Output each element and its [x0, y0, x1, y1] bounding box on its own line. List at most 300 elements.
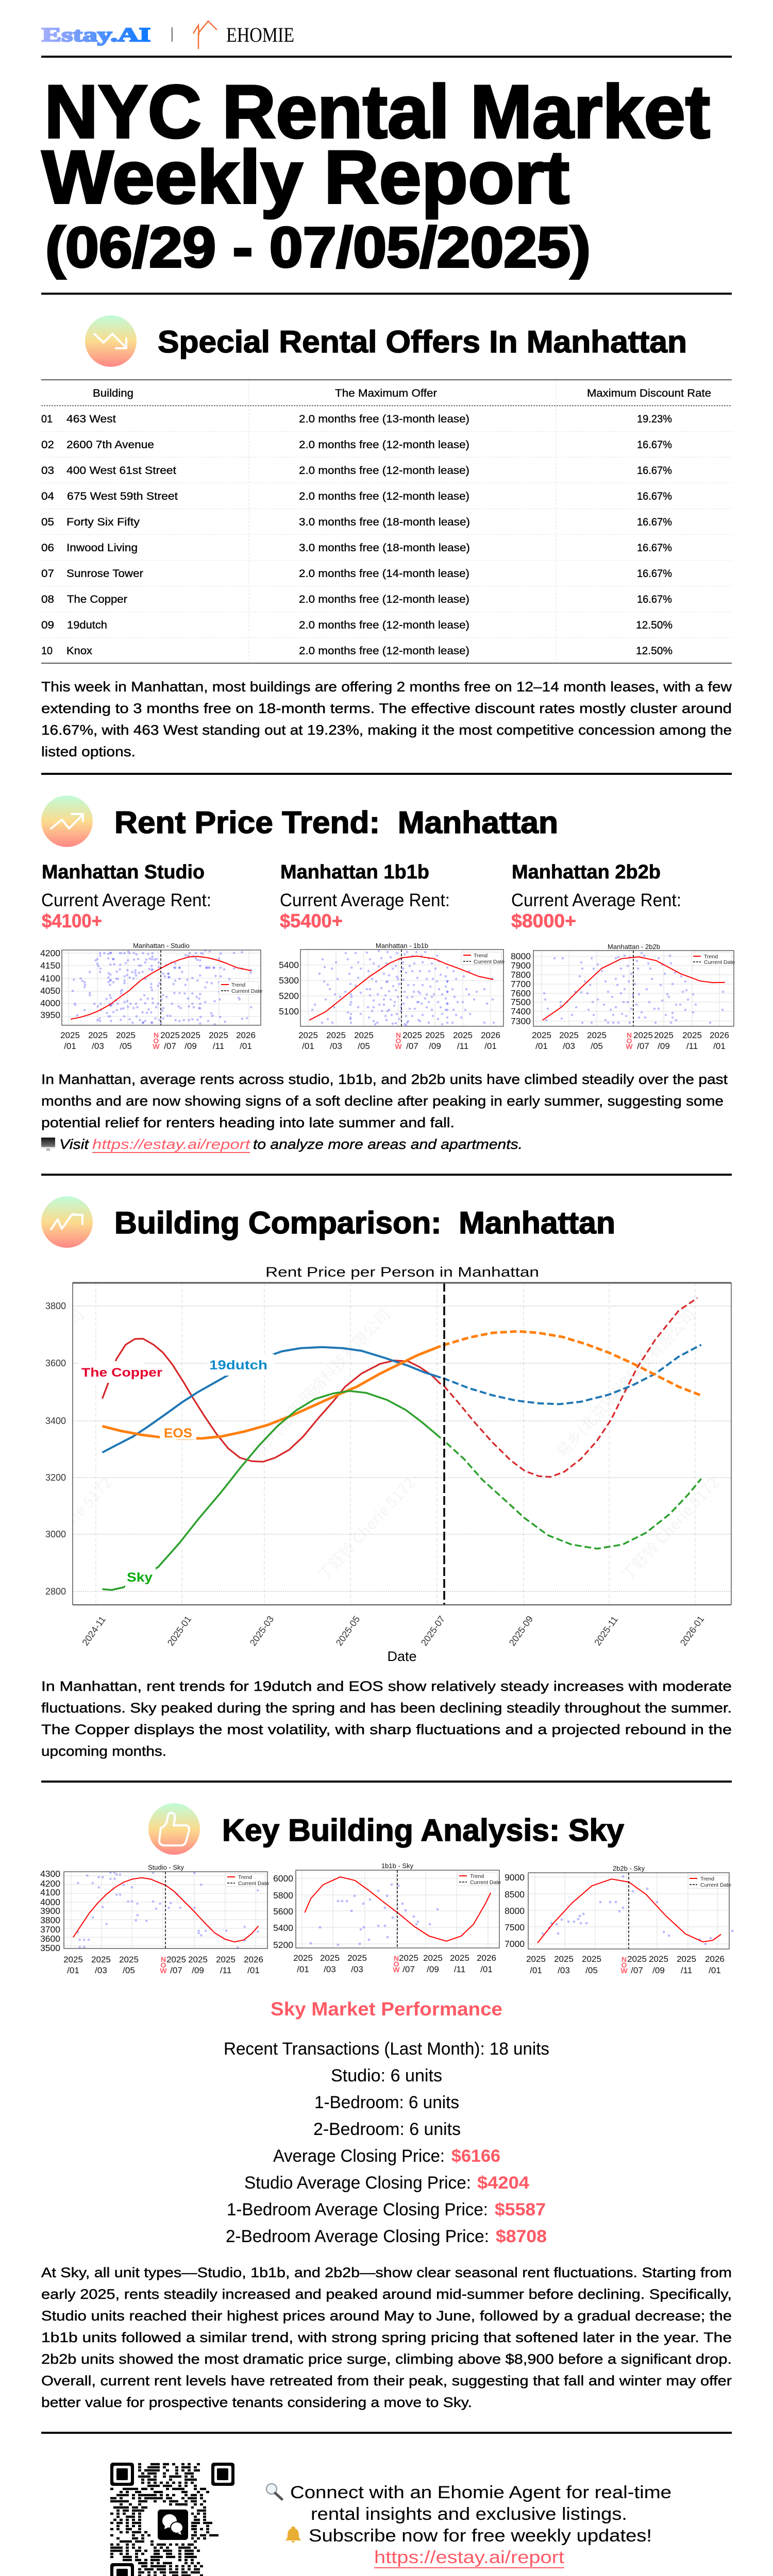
chart: Studio Sky: 2025	[119, 1955, 139, 1964]
chart: Manhattan Studio: /01	[240, 1041, 252, 1051]
chart: Manhattan Studio: 3950	[40, 1010, 60, 1020]
table: offers: 2.0 months free (12-month lease)	[299, 465, 469, 477]
icon: upward trend	[41, 795, 93, 847]
chart: 1b1b Sky: 2025	[293, 1953, 313, 1963]
stat: 1b1b: Manhattan 1b1b	[280, 861, 429, 883]
chart: rent price per person: 2800	[45, 1586, 66, 1597]
panel: key building analysis	[40, 1803, 732, 2410]
current date marker	[443, 1283, 445, 1605]
chart: Studio Sky: 2025	[188, 1955, 208, 1964]
chart: Manhattan Studio: /03	[92, 1041, 104, 1051]
table: offers: 675 West 59th Street	[67, 490, 178, 502]
chart: 1b1b Sky: 5400	[273, 1923, 293, 1933]
chart: Manhattan 1b1b: /11	[457, 1041, 468, 1051]
text: Sky analysis: better value for prospective tenants considering a move to Sky.	[41, 2395, 472, 2410]
chart: Manhattan Studio: 2025	[60, 1030, 80, 1040]
chart: 2b2b Sky: /01	[709, 1965, 721, 1975]
link: estay report: https://estay.ai/report	[374, 2548, 565, 2567]
text: building comparison summary: fluctuations. Sky peaked during the spring and has been declining steadily throughout the summer.	[41, 1700, 732, 1716]
chart: 1b1b Sky: N	[394, 1954, 399, 1962]
table: offers: 08	[41, 594, 54, 605]
chart: Manhattan Studio: /05	[120, 1041, 132, 1051]
chart: rent price per person: 2024-11	[80, 1614, 108, 1648]
stat: 2b2b	[511, 861, 681, 931]
chart: rent price per person: 易乡(北京)网络科技有限公司	[550, 1303, 700, 1462]
table: offers: 19dutch	[67, 619, 107, 631]
header logos	[42, 21, 294, 49]
chart: 1b1b Sky: Current Date	[470, 1879, 501, 1886]
table: offers: 16.67%	[637, 568, 672, 580]
icon: computer	[41, 1138, 55, 1151]
chart: Manhattan Studio: Current Date	[231, 988, 262, 994]
chart: Studio Sky: W	[160, 1967, 167, 1975]
chart: Manhattan 1b1b: /07	[406, 1041, 418, 1051]
chart: 2b2b Sky: 2025	[649, 1954, 668, 1964]
chart: Manhattan 2b2b: 7400	[511, 1006, 531, 1016]
stats: Sky market figures: Studio: 6 units	[331, 2066, 442, 2086]
stats: Sky market figures: $4204	[477, 2173, 529, 2193]
stats: Sky market figures: $6166	[451, 2146, 500, 2166]
chart: Manhattan 1b1b: W	[395, 1042, 402, 1050]
chart: Studio Sky: /11	[220, 1965, 231, 1975]
series: The Copper	[103, 1298, 697, 1477]
chart: Manhattan 1b1b: 5300	[279, 975, 299, 986]
text: rent trend summary: https://estay.ai/report	[92, 1137, 251, 1152]
table: offers: 16.67%	[637, 542, 672, 554]
text: Sky analysis: 1b1b units followed a similar trend, with strong spring pricing that softened later in the year. The	[41, 2330, 732, 2345]
text: building comparison summary	[41, 1679, 732, 1759]
table: offers: Sunrose Tower	[66, 568, 143, 580]
label: EOS: EOS	[164, 1426, 192, 1440]
chart: 1b1b Sky	[273, 1862, 501, 1974]
chart: 1b1b Sky: /09	[427, 1964, 439, 1974]
chart: Manhattan 1b1b: Manhattan - 1b1b	[376, 942, 428, 950]
table: offers: 3.0 months free (18-month lease)	[299, 516, 470, 528]
chart: 2b2b Sky: W	[620, 1967, 628, 1975]
chart: Manhattan Studio: /01	[64, 1041, 76, 1051]
table: offers: 12.50%	[636, 645, 673, 657]
chart: 2b2b Sky: 8500	[505, 1889, 525, 1900]
chart: Manhattan 1b1b: /03	[330, 1041, 342, 1051]
chart: 1b1b Sky: 2025	[423, 1953, 443, 1963]
chart: 2b2b Sky: 2b2b - Sky	[613, 1865, 645, 1872]
text: building comparison summary: In Manhattan, rent trends for 19dutch and EOS show relatively steady increases with moderate	[41, 1679, 732, 1694]
chart: rent price per person: 丁鈺铃 Cherie 5172	[8, 1471, 116, 1585]
chart: Manhattan 1b1b: 2026	[481, 1030, 500, 1040]
chart: Manhattan 2b2b: 2025	[559, 1030, 579, 1040]
chart: Manhattan Studio: 4050	[40, 986, 60, 996]
chart: Manhattan 1b1b: Trend	[474, 953, 488, 959]
table: offers: 16.67%	[637, 516, 672, 528]
text: Sky analysis	[41, 2265, 732, 2410]
stat: 2b2b: $8000+	[511, 910, 576, 931]
table: offers: 2.0 months free (12-month lease)	[299, 619, 469, 631]
table: offers: Knox	[66, 645, 93, 657]
chart: 2b2b Sky: /09	[652, 1965, 665, 1975]
logo: EHOMIE	[193, 21, 294, 49]
chart: Studio Sky: /05	[123, 1965, 135, 1975]
table: offers: 2.0 months free (14-month lease)	[299, 568, 469, 580]
chart: 1b1b Sky: /03	[351, 1964, 363, 1974]
table: offers: 2.0 months free (12-month lease)	[299, 594, 469, 605]
chart: Manhattan Studio: Manhattan - Studio	[133, 942, 190, 950]
chart: Manhattan 2b2b: 2025	[532, 1030, 551, 1040]
chart: 1b1b Sky: /07	[402, 1964, 415, 1974]
panel: building comparison	[0, 1196, 732, 1759]
chart: Manhattan Studio: 4000	[40, 998, 60, 1008]
chart: rent price per person: 3200	[45, 1472, 66, 1483]
chart: 1b1b Sky: 2026	[477, 1953, 496, 1963]
chart: Studio Sky: Studio - Sky	[148, 1863, 184, 1871]
stats: Sky market figures: $8708	[496, 2227, 547, 2246]
text: rent trend summary	[41, 1072, 728, 1153]
text: building comparison summary: The Copper displays the most volatility, with sharp fluctuations and a projected rebound in the	[41, 1722, 732, 1737]
stat: studio	[41, 861, 211, 931]
chart: Manhattan 2b2b: N	[627, 1031, 632, 1039]
series: 19dutch	[103, 1345, 701, 1452]
title: Weekly Report	[42, 135, 569, 219]
chart: Manhattan 2b2b: /05	[591, 1041, 603, 1051]
text: subscribe line: Subscribe now for free weekly updates!	[309, 2526, 652, 2546]
chart: Manhattan 1b1b: 2025	[298, 1030, 318, 1040]
chart: Manhattan 2b2b: Current Date	[704, 959, 735, 965]
heading: key building analysis: Key Building Analysis: Sky	[222, 1813, 625, 1848]
chart: Manhattan Studio: 2025	[209, 1030, 228, 1040]
chart: rent price per person: 2025-03	[248, 1614, 276, 1648]
chart: Studio Sky: N	[161, 1955, 166, 1963]
stats: Sky market figures: Studio Average Closing Price:	[244, 2173, 471, 2193]
label: 19dutch: 19dutch	[209, 1358, 267, 1372]
table: offers: 07	[41, 568, 54, 580]
chart: 1b1b Sky: 2025	[320, 1953, 340, 1963]
chart: 2b2b Sky: O	[621, 1961, 627, 1969]
chart: 2b2b Sky: 2026	[705, 1954, 725, 1964]
table: offers: 02	[41, 439, 54, 451]
chart: Studio Sky: /03	[95, 1965, 107, 1975]
chart: Manhattan 2b2b: Trend	[704, 954, 718, 960]
text: rent trend summary: potential relief for renters heading into late summer and fall.	[41, 1115, 455, 1130]
chart: Manhattan 1b1b: /05	[358, 1041, 370, 1051]
table: offers: 03	[41, 465, 54, 477]
stat: studio: $4100+	[42, 910, 102, 931]
chart: Manhattan Studio: 4150	[40, 960, 60, 971]
text: Sky analysis: Studio units reached their highest prices around May to June, followed by a gradual decrease; the	[41, 2308, 732, 2324]
text: Sky analysis: early 2025, rents steadily increased and peaked around mid-summer before declining. Specifically,	[41, 2286, 732, 2302]
chart: rent price per person: 3800	[45, 1301, 66, 1311]
table: offers: 09	[41, 619, 54, 631]
text: Sky analysis: At Sky, all unit types—Studio, 1b1b, and 2b2b—show clear seasonal rent fluctuations. Starting from	[41, 2265, 732, 2280]
chart: Studio Sky: Trend	[238, 1874, 252, 1880]
table: offers: 12.50%	[636, 619, 673, 631]
table: offers: 01	[41, 413, 53, 425]
chart: Manhattan 2b2b: 7700	[511, 979, 531, 989]
chart: 2b2b Sky: 2025	[526, 1954, 546, 1964]
chart: Studio Sky: 4200	[40, 1878, 60, 1889]
chart: Manhattan Studio: 2026	[236, 1030, 256, 1040]
chart: 1b1b Sky: 5800	[273, 1890, 293, 1901]
chart: Manhattan 2b2b: 7600	[511, 988, 531, 998]
chart: Manhattan Studio: 4200	[40, 948, 60, 958]
QR centre logo	[158, 2510, 188, 2540]
icon: downward trend	[85, 315, 137, 367]
heading: Sky market performance: Sky Market Performance	[271, 1998, 502, 2020]
title: (06/29 - 07/05/2025)	[45, 216, 591, 279]
chart: 1b1b Sky: 1b1b - Sky	[381, 1862, 414, 1870]
stat: 1b1b: $5400+	[280, 910, 343, 931]
chart: Manhattan 1b1b: 2025	[425, 1030, 445, 1040]
chart: Manhattan 2b2b: /09	[658, 1041, 670, 1051]
text: insights line: rental insights and exclusive listings.	[311, 2504, 627, 2524]
chart: 1b1b Sky: 6000	[273, 1873, 293, 1884]
chart: Manhattan 2b2b: /07	[637, 1041, 649, 1051]
chart: rent price per person: 易乡(北京)网络科技有限公司	[244, 1303, 394, 1462]
text: rent trend summary: months and are now showing signs of a soft decline after peaking in early summer, suggesting some	[41, 1093, 724, 1109]
stats: Sky market figures	[224, 2039, 549, 2246]
QR finder patterns	[110, 2463, 234, 2576]
table: offers: 2.0 months free (12-month lease)	[299, 490, 469, 502]
chart: Manhattan Studio: /07	[164, 1041, 176, 1051]
chart: 1b1b Sky: /03	[324, 1964, 336, 1974]
stats: Sky market figures: Recent Transactions (Last Month): 18 units	[224, 2039, 549, 2059]
chart: 2b2b Sky: Current Date	[700, 1882, 731, 1888]
chart: Manhattan Studio: Trend	[231, 982, 245, 988]
chart: Manhattan 1b1b: Current Date	[474, 959, 505, 965]
chart: Manhattan 1b1b: 5100	[279, 1006, 299, 1016]
text: offers summary: extending to 3 months free on 18-month terms. The effective discount rates mostly cluster around	[41, 701, 732, 716]
chart: Manhattan 1b1b: 2025	[326, 1030, 346, 1040]
chart: Manhattan 1b1b: N	[396, 1031, 401, 1039]
text: offers summary: This week in Manhattan, most buildings are offering 2 months free on 12–14 month leases, with a few	[41, 679, 732, 694]
text: rent trend summary: Visit	[59, 1137, 90, 1152]
chart: Studio Sky: 3600	[40, 1934, 60, 1944]
table: offers: 06	[41, 542, 54, 554]
chart: Manhattan Studio: /09	[184, 1041, 197, 1051]
chart: 1b1b Sky: /01	[297, 1964, 309, 1974]
axis label: Date: Date	[387, 1649, 417, 1664]
chart: Manhattan Studio: W	[153, 1042, 160, 1050]
chart: Studio Sky: 3500	[40, 1943, 60, 1953]
chart: Manhattan Studio: 4100	[40, 973, 60, 984]
stats: Sky market figures: $5587	[495, 2200, 546, 2219]
chart: Manhattan Studio: N	[154, 1031, 159, 1039]
icon: bell	[285, 2527, 301, 2543]
chart: Manhattan 2b2b: 2026	[710, 1030, 729, 1040]
table: offers: The Copper	[67, 594, 127, 605]
chart: rent price per person	[0, 1264, 731, 1664]
chart: 2b2b Sky: /01	[530, 1965, 542, 1975]
heading: building comparison: Building Comparison: Manhattan	[114, 1206, 615, 1240]
chart: Studio Sky: 4300	[40, 1869, 60, 1879]
chart: Manhattan 1b1b: 2025	[402, 1030, 422, 1040]
chart: Studio Sky: Current Date	[238, 1880, 269, 1887]
chart: 2b2b Sky: 2025	[582, 1954, 601, 1964]
chart: Manhattan 2b2b: O	[627, 1037, 632, 1045]
chart: Manhattan 1b1b	[279, 942, 505, 1051]
chart: 1b1b Sky: 2025	[347, 1953, 367, 1963]
chart: 1b1b Sky: Trend	[470, 1873, 484, 1879]
stat: 1b1b	[280, 861, 450, 931]
heading: rent price trend: Rent Price Trend: Manhattan	[114, 805, 558, 840]
chart: 2b2b Sky: /03	[558, 1965, 570, 1975]
chart: 1b1b Sky: W	[393, 1965, 400, 1974]
table: offers: Maximum Discount Rate	[587, 387, 711, 399]
chart: 2b2b Sky: N	[621, 1955, 627, 1963]
stat: studio: Manhattan Studio	[42, 861, 205, 883]
label: 19dutch	[207, 1354, 274, 1376]
text: building comparison summary: upcoming months.	[41, 1743, 166, 1759]
chart: rent price per person: 2026-01	[678, 1614, 706, 1648]
chart: 1b1b Sky: 5200	[273, 1940, 293, 1950]
chart: 2b2b Sky: 7000	[505, 1939, 525, 1949]
table: offers: 16.67%	[637, 490, 672, 502]
table: offers: 463 West	[66, 413, 116, 425]
table: offers: 10	[41, 645, 53, 657]
chart: Manhattan 1b1b: 5400	[279, 960, 299, 970]
series: EOS	[103, 1331, 701, 1438]
stats: Sky market figures: Average Closing Price:	[273, 2146, 445, 2166]
chart: Studio Sky: O	[161, 1961, 166, 1969]
chart: Manhattan 2b2b: 2025	[633, 1030, 653, 1040]
chart: Studio Sky: 2026	[244, 1955, 263, 1964]
stat: 2b2b: Current Average Rent:	[511, 890, 681, 910]
chart: Studio Sky: /07	[170, 1965, 182, 1975]
chart: 2b2b Sky: 8000	[505, 1906, 525, 1916]
chart: rent price per person: 2025-01	[165, 1614, 193, 1648]
chart: Manhattan Studio: 2025	[181, 1030, 200, 1040]
chart: Manhattan 2b2b: W	[626, 1042, 633, 1050]
chart: Manhattan 2b2b: /01	[713, 1041, 726, 1051]
chart: Studio Sky: 2025	[91, 1955, 111, 1964]
panel: special rental offers	[41, 315, 732, 759]
chart: Manhattan 1b1b: /09	[429, 1041, 441, 1051]
chart: Studio Sky: 3800	[40, 1915, 60, 1925]
chart: Manhattan 1b1b: /01	[302, 1041, 314, 1051]
logo: Estay.AI: Estay.AI	[42, 24, 150, 46]
table: offers: 19.23%	[637, 413, 672, 425]
title	[42, 70, 710, 279]
chart: Studio Sky: /01	[247, 1965, 260, 1975]
icon: rising trend	[41, 1196, 93, 1248]
chart: 2b2b Sky: /11	[681, 1965, 692, 1975]
panel: call to action	[110, 2463, 671, 2576]
text: rent trend summary: to analyze more areas and apartments.	[253, 1137, 523, 1152]
table: offers: 04	[41, 490, 54, 502]
table: offers: The Maximum Offer	[335, 387, 437, 399]
chart: Manhattan Studio: 2025	[116, 1030, 136, 1040]
chart: 2b2b Sky: /05	[585, 1965, 598, 1975]
table: offers	[41, 379, 732, 664]
text: Sky analysis: 2b2b units showed the most dramatic price surge, climbing above $8,900 before a significant drop.	[41, 2351, 732, 2367]
chart: Studio Sky: 2025	[216, 1955, 236, 1964]
chart: Studio Sky: /09	[192, 1965, 204, 1975]
chart: 1b1b Sky: /11	[454, 1964, 465, 1974]
chart: Manhattan 2b2b: 2025	[587, 1030, 607, 1040]
chart: Manhattan 1b1b: O	[396, 1037, 401, 1045]
chart: 2b2b Sky: 7500	[505, 1922, 525, 1933]
chart: 2b2b Sky: 2025	[677, 1954, 696, 1964]
chart: rent price per person: 3000	[45, 1529, 66, 1539]
stat: 1b1b: Current Average Rent:	[280, 890, 450, 910]
chart: Studio Sky: 2025	[166, 1955, 186, 1964]
table: offers: 2600 7th Avenue	[66, 439, 154, 451]
label: Sky: Sky	[127, 1570, 153, 1585]
chart: Manhattan 2b2b: 8000	[511, 951, 531, 961]
table: offers: Inwood Living	[66, 542, 138, 554]
label: The Copper	[79, 1361, 162, 1383]
chart: 2b2b Sky	[505, 1865, 732, 1975]
chart: rent price per person: 3600	[45, 1358, 66, 1368]
chart: rent price per person: 2025-09	[507, 1614, 535, 1648]
text: connect line: Connect with an Ehomie Agent for real-time	[290, 2483, 671, 2502]
stat: studio: Current Average Rent:	[41, 890, 211, 910]
label: The Copper: The Copper	[81, 1366, 162, 1380]
stats: Sky market figures: 1-Bedroom: 6 units	[314, 2093, 459, 2112]
text: Sky analysis: Overall, current rent levels have retreated from their peak, suggesting that fall and winter may offer	[41, 2373, 732, 2388]
chart: 1b1b Sky: /01	[480, 1964, 493, 1974]
chart: rent price per person: 2025-11	[592, 1614, 620, 1648]
heading: special rental offers: Special Rental Offers In Manhattan	[158, 325, 687, 359]
chart: Manhattan Studio: 2025	[160, 1030, 180, 1040]
table: offers: 05	[41, 516, 54, 528]
text: offers summary	[41, 679, 732, 759]
chart: Manhattan 1b1b: 5200	[279, 991, 299, 1001]
chart: Manhattan 2b2b: 2025	[654, 1030, 674, 1040]
chart: 2b2b Sky: 2025	[627, 1954, 647, 1964]
chart: Manhattan 2b2b: Manhattan - 2b2b	[608, 943, 660, 951]
chart: 1b1b Sky: 5600	[273, 1906, 293, 1917]
chart: Studio Sky: 3900	[40, 1906, 60, 1916]
chart: Studio Sky: 3700	[40, 1924, 60, 1935]
chart: Manhattan Studio	[40, 942, 262, 1051]
QR code	[110, 2463, 234, 2576]
chart: 2b2b Sky: 2025	[554, 1954, 574, 1964]
chart: 2b2b Sky: 9000	[505, 1872, 525, 1883]
text: rent trend summary: In Manhattan, average rents across studio, 1b1b, and 2b2b units have climbed steadily over the past	[41, 1072, 728, 1087]
chart: Studio Sky: 2025	[63, 1955, 83, 1964]
chart: rent price per person: 丁鈺铃 Cherie 5172	[615, 1471, 723, 1585]
chart: Manhattan 2b2b	[511, 943, 735, 1051]
table: offers: 3.0 months free (18-month lease)	[299, 542, 470, 554]
chart: Manhattan 2b2b: /01	[535, 1041, 548, 1051]
chart: Manhattan Studio: /11	[213, 1041, 224, 1051]
chart: Manhattan 2b2b: /03	[563, 1041, 575, 1051]
stats: Sky market figures: 2-Bedroom: 6 units	[313, 2120, 461, 2139]
table: offers: Building	[93, 387, 133, 399]
text: offers summary: listed options.	[41, 744, 136, 759]
chart: 2b2b Sky: /07	[631, 1965, 643, 1975]
table: offers: Forty Six Fifty	[66, 516, 140, 528]
stats: Sky market figures: 2-Bedroom Average Closing Price:	[226, 2227, 489, 2246]
title: NYC Rental Market	[44, 70, 710, 154]
table: offers: 16.67%	[637, 594, 672, 605]
logo: EHOMIE: EHOMIE	[226, 23, 294, 46]
chart: 1b1b Sky: O	[394, 1960, 399, 1968]
table: offers: 16.67%	[637, 465, 672, 477]
chart: Studio Sky: 4000	[40, 1897, 60, 1907]
chart: rent price per person: 3400	[45, 1416, 66, 1426]
table: offers: 400 West 61st Street	[66, 465, 176, 477]
table: offers: 2.0 months free (12-month lease)	[299, 439, 469, 451]
icon: thumbs up	[148, 1803, 200, 1855]
chart: Manhattan Studio: 2025	[88, 1030, 108, 1040]
label: Sky	[125, 1567, 156, 1587]
table: offers: 2.0 months free (13-month lease)	[299, 413, 469, 425]
text: offers summary: 16.67%, with 463 West standing out at 19.23%, making it the most competitive concession among the	[41, 722, 732, 738]
chart: rent price per person: 丁鈺铃 Cherie 5172	[312, 1471, 419, 1585]
chart: Studio Sky: 4100	[40, 1887, 60, 1897]
chart: Manhattan 2b2b: 2025	[682, 1030, 702, 1040]
chart: Studio Sky	[40, 1863, 269, 1975]
